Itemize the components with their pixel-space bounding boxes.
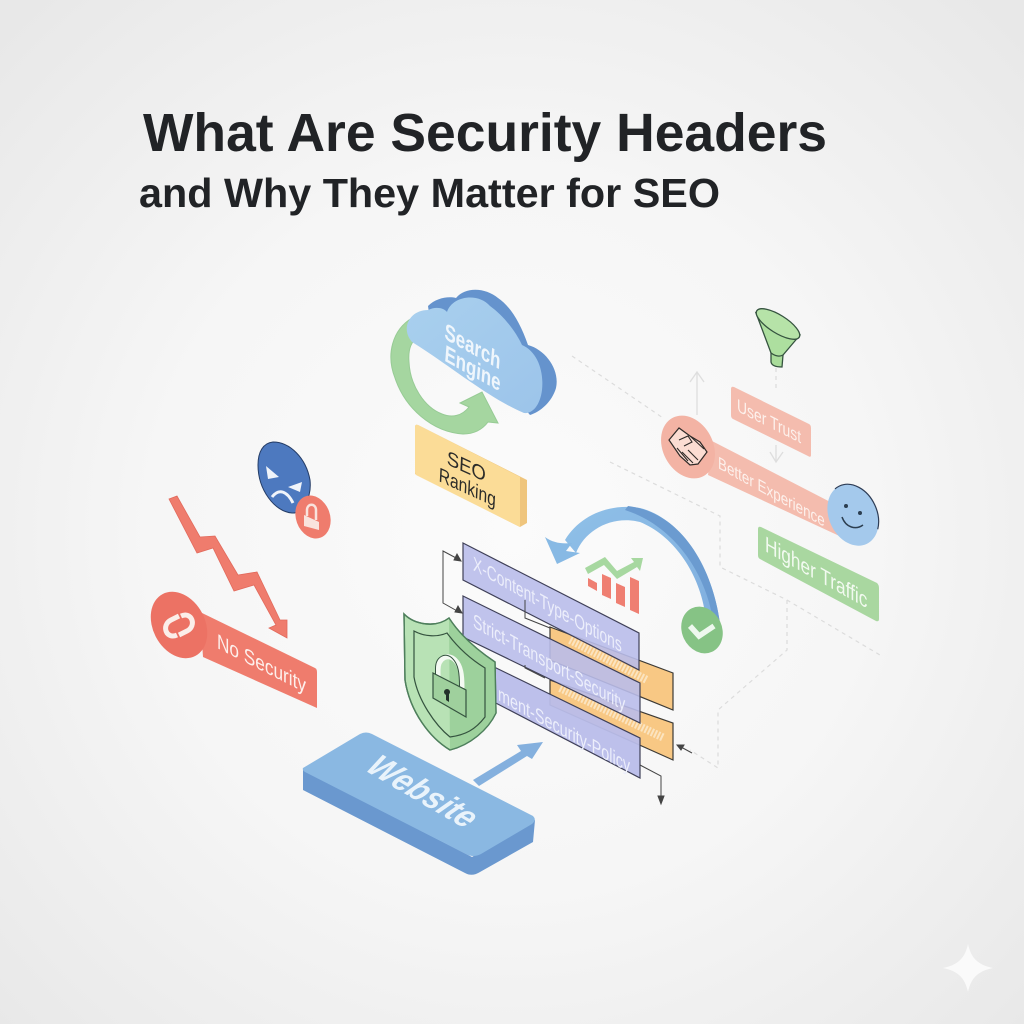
icon: green shield with padlock	[404, 614, 496, 750]
icon: handshake badge	[650, 406, 726, 488]
arrow: falling red zigzag	[169, 496, 287, 638]
title: What Are Security Headers	[143, 103, 827, 163]
label: better experience: Better Experience	[718, 453, 825, 531]
icon: broken link	[166, 615, 192, 636]
icon: smiley badge	[818, 476, 888, 554]
label: no security: No Security	[217, 630, 306, 698]
icon: angry mask	[258, 442, 310, 513]
panel: Content-Security-Policy	[490, 665, 640, 778]
panel: Strict-Transport-Security	[463, 596, 640, 723]
label: no security	[140, 582, 317, 708]
card: SEO ranking: Ranking	[438, 464, 496, 512]
icon: funnel	[752, 303, 804, 367]
padlock	[433, 655, 466, 717]
panel: X-Content-Type-Options: X-Content-Type-Options	[473, 553, 622, 657]
icon: search engine cloud	[407, 290, 557, 415]
card: SEO ranking	[415, 425, 527, 527]
connector arrows around header panels	[443, 551, 692, 804]
label: user trust: User Trust	[737, 395, 801, 447]
chart: rising bars with trend arrow	[585, 557, 643, 614]
arrows around user trust	[690, 372, 783, 462]
arrow: website to headers	[473, 742, 543, 786]
panel: Strict-Transport-Security: Strict-Transport-Security	[473, 610, 625, 716]
label: higher traffic: Higher Traffic	[765, 531, 867, 613]
label: search engine: Engine	[444, 340, 502, 396]
icon: sparkle watermark	[943, 944, 993, 992]
icon: curved blue arrow	[545, 506, 720, 623]
card: SEO ranking: SEO	[446, 447, 486, 487]
label: search engine	[444, 318, 502, 396]
panel: orange header values	[550, 627, 673, 760]
dashed connector lines	[572, 356, 880, 768]
icon: check badge	[674, 600, 730, 660]
title: and Why They Matter for SEO	[139, 170, 720, 216]
icon: padlock badge	[290, 491, 336, 543]
icon: green cycle arrow	[391, 318, 498, 434]
label: search engine: Search	[444, 318, 502, 374]
title	[139, 103, 827, 216]
card: website	[303, 732, 535, 875]
panel: Content-Security-Policy: ment-Security-Policy	[498, 683, 630, 778]
card: website: Website	[358, 749, 487, 835]
